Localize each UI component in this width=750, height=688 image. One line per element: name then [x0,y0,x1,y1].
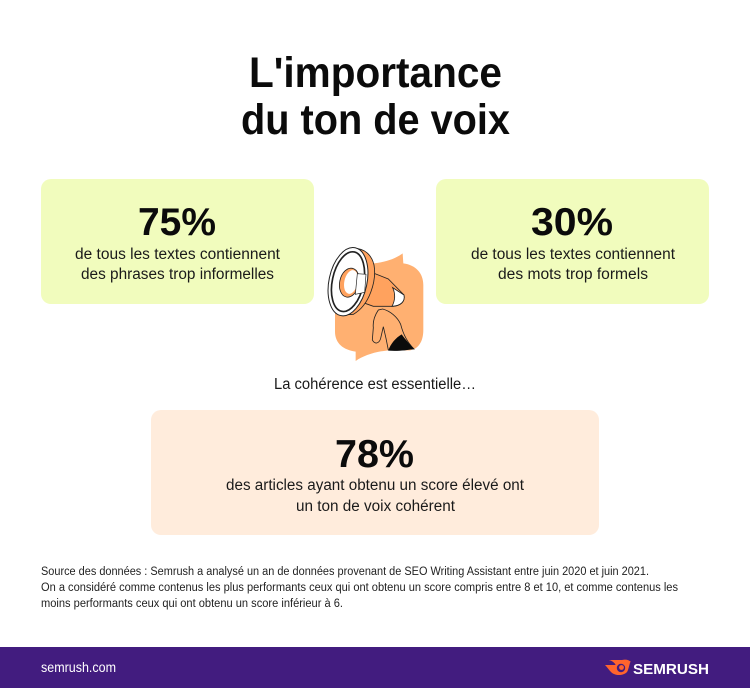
panel: 30% formal words [436,179,709,304]
text: 78% description [226,477,525,515]
text: website: semrush.com [41,660,116,675]
footer bar [0,647,750,688]
stat: 75%: 75% [138,201,216,244]
text: 30% description [471,246,676,283]
text: 75% description: des phrases trop informelles [81,266,274,283]
panel: 75% informal phrases [41,179,314,304]
text: Semrush wordmark: SEMRUSH [633,662,709,678]
text: 78% description: des articles ayant obtenu un score élevé ont [226,477,525,494]
stat: 30%: 30% [531,201,613,244]
text: 78% description: un ton de voix cohérent [296,498,456,515]
text: data source note: On a considéré comme contenus les plus performants ceux qui ont obtenu un score compris entre 8 et 10, et comme contenus les [41,582,678,594]
text: 75% description: de tous les textes contiennent [75,246,281,263]
panel: 78% consistent tone [151,410,599,535]
text: data source note: Source des données : Semrush a analysé un an de données provenant de SEO Writing Assistant entre juin 2020 et juin 2021. [41,566,649,578]
text: 75% description [75,246,281,283]
text: data source note [41,566,678,610]
title: L'importance [249,49,502,97]
text: data source note: moins performants ceux qui ont obtenu un score inférieur à 6. [41,598,343,610]
text: 30% description: de tous les textes contiennent [471,246,676,263]
text: consistency line: La cohérence est essentielle… [274,376,476,393]
title [241,49,510,144]
icon: Semrush flame logo [605,660,631,675]
title: du ton de voix [241,96,510,144]
icon: megaphone held by a hand [322,244,423,361]
text: 30% description: des mots trop formels [498,266,648,283]
stat: 78%: 78% [335,433,414,476]
